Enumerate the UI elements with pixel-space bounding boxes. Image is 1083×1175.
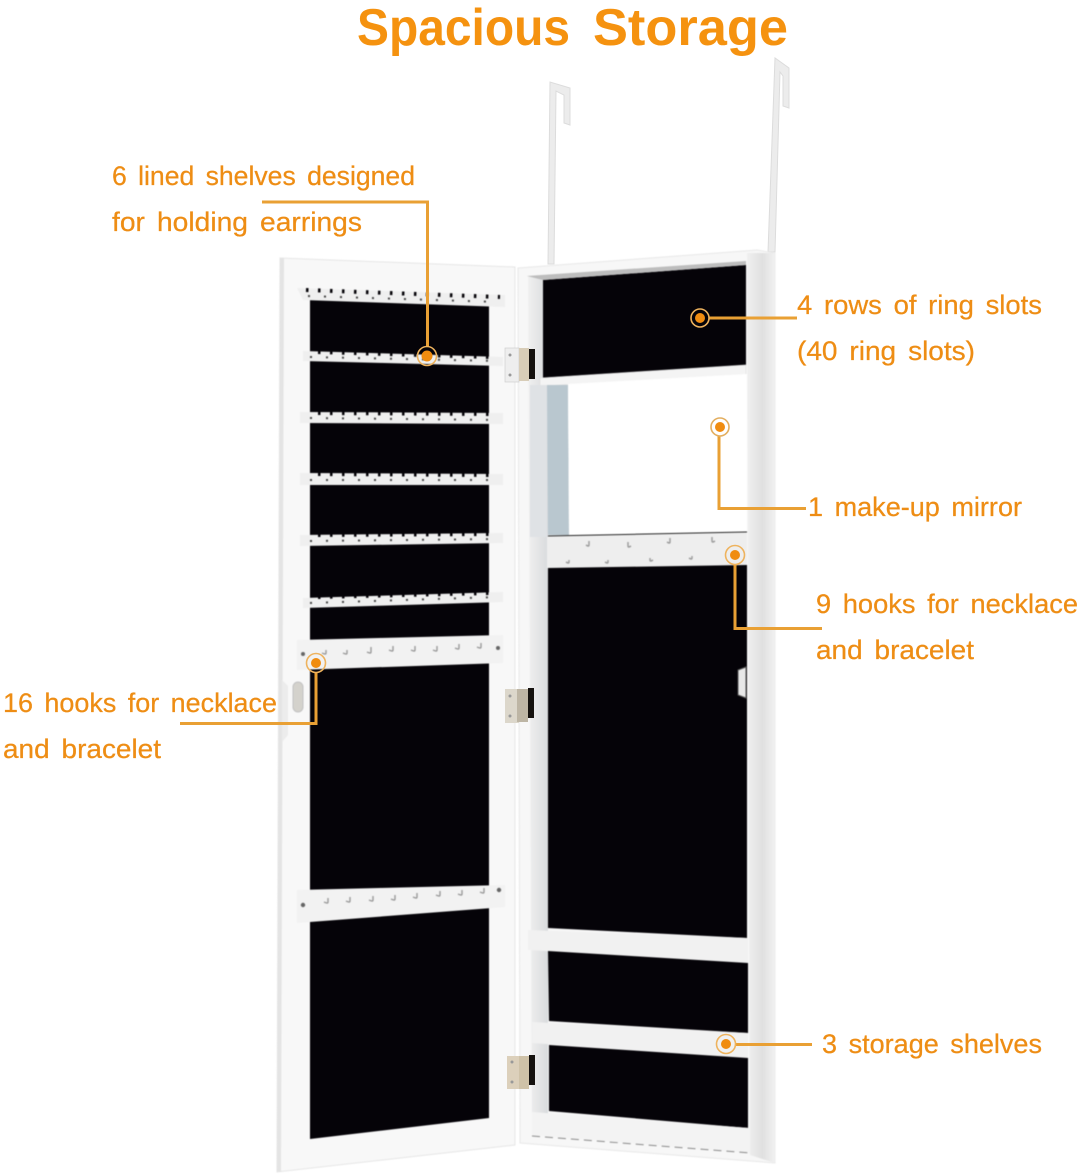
earring shelf 3 [300,412,503,424]
callout: storage shelves [716,1029,1042,1059]
storage shelf 2 [532,1022,748,1058]
callout: 4 rows of ring slots: 4 rows of ring slots [797,290,1042,320]
door black lining [310,296,489,1139]
callout: 16 hooks on door [3,654,326,764]
earring shelf 6 [303,592,503,608]
title: Storage [593,0,788,57]
icon: middle hinge [505,688,534,723]
callout: 9 hooks in cabinet [726,546,1078,665]
icon: bottom hinge [507,1055,535,1089]
callout: 16 hooks on door: and bracelet [3,734,162,764]
ring slot panel [527,261,746,386]
cabinet black section [548,951,748,1033]
title [357,0,788,57]
hook bar in cabinet [547,532,747,568]
cabinet frame [518,250,775,1163]
earring shelf 4 [300,473,503,485]
inner left wall [528,276,548,1130]
callout: 9 hooks in cabinet: 9 hooks for necklace [816,589,1078,619]
callout: make-up mirror [711,418,1022,522]
callout: 9 hooks in cabinet: and bracelet [816,635,975,665]
callout: 4 rows of ring slots: (40 ring slots) [797,336,975,366]
storage shelf 1 [528,930,748,963]
earring shelf 5 [300,533,503,546]
callout: 6 lined shelves: for holding earrings [112,207,362,237]
callout: storage shelves: 3 storage shelves [822,1029,1042,1059]
door catch [738,667,746,698]
icon: right over-door hanger [768,58,789,252]
callout: 6 lined shelves [112,161,436,366]
necklace hook bar upper [297,635,503,670]
earring shelf 2 [303,351,503,366]
panel: open left door [277,258,515,1172]
door frame [277,258,515,1172]
title: Spacious [357,0,570,57]
callout: make-up mirror: 1 make-up mirror [808,492,1022,522]
icon: left over-door hanger [548,82,570,264]
panel: cabinet body [518,250,775,1163]
storage shelf 3 [532,1112,750,1153]
callout: 6 lined shelves: 6 lined shelves designed [112,161,415,191]
make-up mirror [530,374,747,537]
icon: top hinge [505,348,535,382]
right side of cabinet [747,253,775,1163]
cabinet black section [549,1045,748,1128]
earring shelf 1 [297,288,505,307]
callout: 16 hooks on door: 16 hooks for necklace [3,688,277,718]
door lock [282,680,303,742]
callout: 4 rows of ring slots [691,290,1042,366]
necklace hook bar lower [297,885,505,923]
cabinet black lining [548,565,747,938]
